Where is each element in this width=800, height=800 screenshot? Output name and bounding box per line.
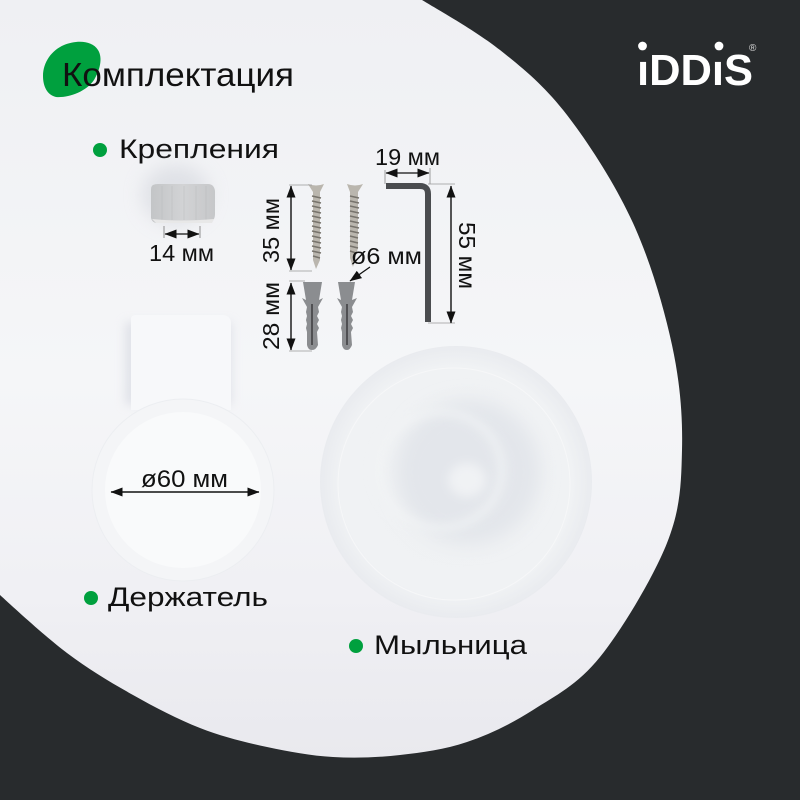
label: Держатель [108, 582, 268, 612]
dimension: diameter 6 mm: ø6 мм [351, 243, 422, 269]
registered mark: ® [749, 43, 757, 54]
dimension: 28 mm [258, 281, 312, 351]
dimension: 14 mm: 14 мм [149, 240, 214, 266]
icon: metal mounting block [142, 165, 215, 225]
label: Крепления [119, 134, 279, 164]
icon: hex key [386, 186, 428, 322]
dimension: diameter 60 mm: ø60 мм [141, 466, 228, 493]
label: Мыльница [374, 630, 528, 660]
dimension: 14 mm [149, 226, 214, 266]
dimension: 35 mm: 35 мм [258, 198, 284, 263]
bullet [349, 639, 363, 653]
dimension: 55 mm: 55 мм [454, 222, 480, 289]
title [43, 42, 294, 97]
section: holder label [84, 582, 268, 612]
icon: screws [308, 184, 363, 269]
dimension: 19 mm: 19 мм [375, 144, 440, 170]
section: fastenings [93, 134, 279, 164]
icon: frosted glass soap dish [320, 346, 592, 618]
logo: IDDIS: ıDDıS [637, 46, 753, 95]
icon: wall plugs [302, 282, 357, 350]
icon: white holder [92, 315, 274, 581]
bullet [93, 143, 107, 157]
dimension: 35 mm [258, 185, 312, 271]
section: soap dish label [349, 630, 528, 660]
dimension: 28 mm: 28 мм [258, 282, 284, 350]
dimension: 19 mm [375, 144, 440, 184]
title text: Комплектация [62, 56, 294, 93]
green blob [43, 42, 101, 97]
dimension: diameter 6 mm [350, 243, 422, 281]
dimension: 55 mm [428, 184, 480, 323]
bullet [84, 591, 98, 605]
